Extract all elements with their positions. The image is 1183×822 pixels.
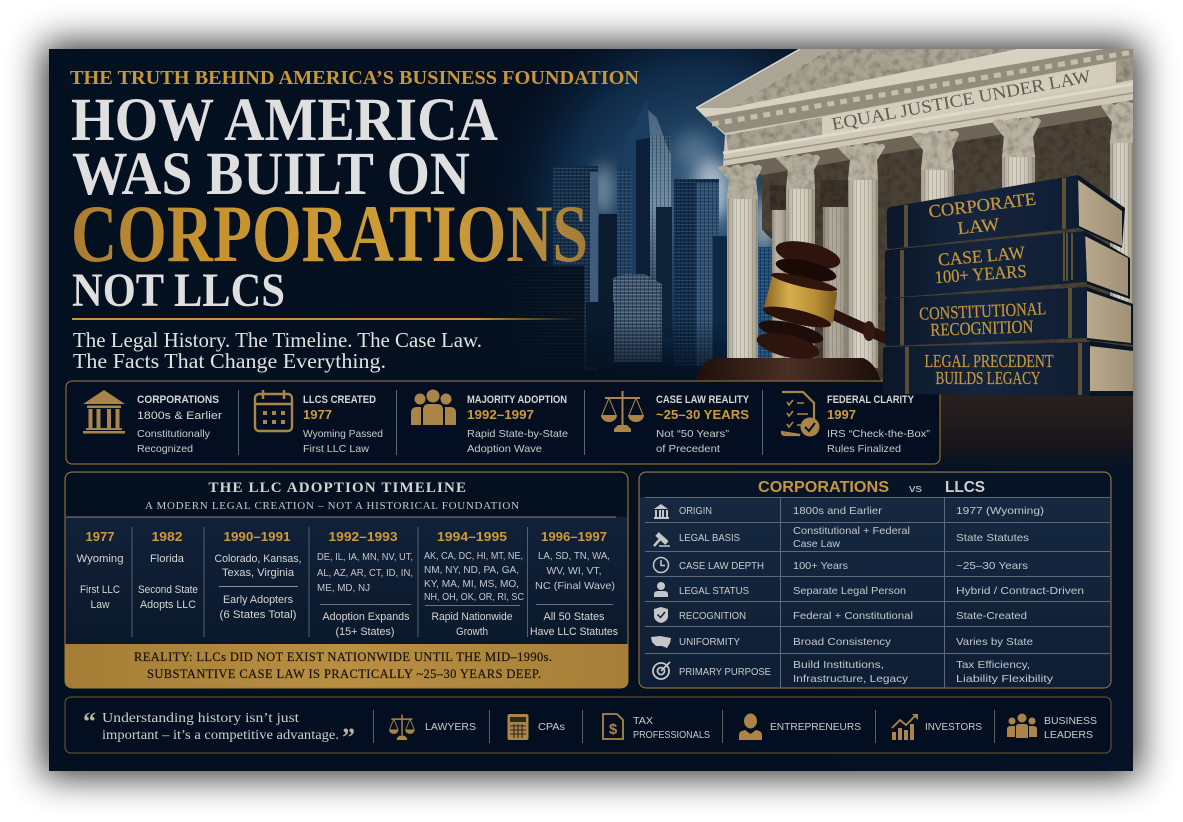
column 1994–1995: 1994–1995 [437, 529, 507, 544]
row: origin [654, 504, 1044, 519]
row: recognition: State-Created [956, 610, 1027, 622]
fact: majority adoption: MAJORITY ADOPTION [467, 394, 567, 406]
column 1977: First LLC [80, 584, 120, 596]
column 1982: Adopts LLC [140, 599, 196, 611]
fact: majority adoption [467, 394, 568, 455]
column 2 [776, 154, 820, 362]
row: legal basis [654, 525, 1029, 550]
reality callout: REALITY: LLCs DID NOT EXIST NATIONWIDE UNTIL THE MID–1990s. [134, 650, 552, 664]
column 1994–1995: Rapid Nationwide [432, 611, 512, 623]
icon: clock [654, 558, 668, 572]
quote: important – it’s a competitive advantage. [102, 728, 339, 743]
gold rule [72, 318, 577, 320]
fact: corporations: Constitutionally [137, 428, 211, 440]
book 3: CONSTITUTIONAL [919, 298, 1047, 324]
audience: investors: INVESTORS [925, 721, 982, 733]
column 1982 [138, 529, 198, 611]
column 3 [838, 143, 885, 368]
cornice [696, 49, 1101, 117]
column 1990–1991: Early Adopters [223, 594, 293, 606]
row: legal basis: Constitutional + Federal [793, 525, 910, 537]
audience: tax professionals: TAX [633, 715, 653, 727]
column 1990–1991: Texas, Virginia [222, 567, 295, 579]
clouds [593, 132, 771, 253]
audience: entrepreneurs [739, 714, 861, 740]
audience: business leaders [1007, 714, 1097, 741]
row: uniformity: Broad Consistency [793, 636, 892, 648]
stack of law books [883, 175, 1133, 396]
row: uniformity: Varies by State [956, 636, 1033, 648]
pediment relief [730, 49, 1018, 108]
book 2 [885, 231, 1130, 299]
row: primary purpose: Build Institutions, [793, 659, 884, 671]
column 1996–1997: Have LLC Statutes [530, 626, 618, 638]
column 1994–1995: Growth [456, 626, 488, 638]
dentil zone [705, 44, 1133, 133]
back columns [770, 180, 850, 360]
book 3 [885, 287, 1133, 346]
title line 1: HOW AMERICA [71, 87, 498, 154]
icon: target [653, 662, 670, 679]
fact: corporations: CORPORATIONS [137, 394, 219, 406]
interior shadow [762, 116, 1133, 380]
comparison header: LLCS [945, 479, 985, 496]
column 1992–1993: (15+ States) [336, 626, 394, 638]
icon: bank [654, 504, 669, 519]
city skyline [500, 99, 772, 382]
fact: federal clarity: IRS “Check-the-Box” [827, 428, 931, 440]
fact: majority adoption: Rapid State-by-State [467, 428, 568, 440]
fact: case law reality: of Precedent [656, 443, 720, 455]
column 1994–1995: KY, MA, MI, MS, MO, [424, 578, 519, 590]
fact: federal clarity: FEDERAL CLARITY [827, 394, 915, 406]
subtitle: The Facts That Change Everything. [73, 349, 386, 373]
column 1990–1991: Colorado, Kansas, [214, 553, 302, 565]
left frieze relief [726, 117, 822, 153]
sky glow [516, 49, 795, 362]
row: origin: 1800s and Earlier [793, 505, 883, 517]
book 4: BUILDS LEGACY [936, 368, 1040, 388]
column 1992–1993 [317, 529, 413, 638]
row: legal status [654, 582, 1084, 597]
audience: lawyers: LAWYERS [425, 721, 476, 733]
courthouse [696, 44, 1133, 395]
fact: LLCs created: LLCS CREATED [303, 394, 376, 406]
row: case law depth: ~25–30 Years [956, 560, 1028, 572]
column 1994–1995 [424, 529, 524, 638]
gavel [695, 236, 885, 384]
fact: case law reality: CASE LAW REALITY [656, 394, 750, 406]
entablature [696, 49, 1133, 166]
row: case law depth [654, 558, 1028, 572]
audience: investors [892, 714, 982, 740]
title line 4: NOT LLCS [72, 264, 285, 317]
fact: LLCs created: First LLC Law [303, 443, 369, 455]
fact: majority adoption: Adoption Wave [467, 443, 542, 455]
row: legal status: Hybrid / Contract-Driven [956, 585, 1084, 597]
row: case law depth: CASE LAW DEPTH [679, 560, 764, 572]
audience: lawyers [389, 715, 476, 740]
column 1992–1993: 1992–1993 [328, 529, 398, 544]
icon: courthouse [83, 390, 125, 434]
panel: LLC adoption timeline [65, 472, 628, 688]
row: primary purpose: Infrastructure, Legacy [793, 673, 909, 685]
book 3: RECOGNITION [930, 316, 1034, 340]
column 1992–1993: AL, AZ, AR, CT, ID, IN, [317, 567, 413, 579]
head [756, 241, 840, 359]
inscription: EQUAL JUSTICE UNDER LAW [830, 66, 1092, 134]
column 1996–1997: LA, SD, TN, WA, [538, 550, 610, 562]
column 5 [992, 117, 1041, 195]
row: legal basis: LEGAL BASIS [679, 532, 740, 544]
book 1: LAW [956, 214, 1000, 238]
fact: corporations: Recognized [137, 443, 193, 455]
icon: gavel [654, 534, 670, 546]
fact: federal clarity: Rules Finalized [827, 443, 901, 455]
row: primary purpose: Liability Flexibility [956, 673, 1054, 685]
column 1996–1997: All 50 States [544, 611, 605, 623]
comparison header: vs [909, 483, 923, 495]
icon: people [411, 390, 456, 425]
icon: shield [654, 607, 668, 623]
panel: corporations vs LLCs comparison [639, 472, 1111, 688]
panel: key facts strip [66, 381, 940, 464]
audience: tax professionals: PROFESSIONALS [633, 729, 710, 741]
audience: tax professionals: $ [609, 721, 618, 738]
audience: tax professionals [603, 714, 710, 741]
inscription band [823, 62, 1113, 137]
title line 3: CORPORATIONS [71, 188, 588, 279]
column 1996–1997: 1996–1997 [541, 529, 607, 544]
column 1977: Law [90, 599, 110, 611]
column 1 [718, 164, 762, 360]
book 2: CASE LAW [937, 242, 1026, 270]
quote: ” [342, 723, 355, 752]
fact: corporations: 1800s & Earlier [137, 410, 222, 422]
row: origin: ORIGIN [679, 505, 712, 517]
sound block [696, 358, 880, 380]
column 1992–1993: ME, MD, NJ [317, 582, 370, 594]
row: recognition [654, 607, 1027, 623]
column 1977: 1977 [86, 529, 114, 544]
reality callout [66, 644, 628, 688]
book 1 [887, 175, 1125, 249]
icon: scales [601, 391, 644, 432]
audience: CPAs: CPAs [538, 721, 565, 733]
column 1992–1993: DE, IL, IA, MN, NV, UT, [317, 551, 413, 563]
row: recognition: Federal + Constitutional [793, 610, 913, 622]
fact: majority adoption: 1992–1997 [467, 407, 534, 422]
column 1992–1993: Adoption Expands [322, 611, 410, 623]
quote [83, 707, 355, 752]
book 4 [883, 341, 1133, 396]
subtitle [73, 332, 481, 372]
row: primary purpose [653, 659, 1054, 685]
audience: entrepreneurs: ENTREPRENEURS [770, 721, 861, 733]
audience: CPAs [508, 714, 565, 740]
column 6 [1101, 101, 1133, 304]
timeline heading: THE LLC ADOPTION TIMELINE [208, 480, 466, 496]
soffit [723, 99, 1133, 175]
fact: federal clarity: 1997 [827, 407, 856, 422]
eyebrow heading: THE TRUTH BEHIND AMERICA’S BUSINESS FOUNDATION [70, 67, 640, 89]
audience: business leaders: LEADERS [1044, 729, 1093, 741]
column 1990–1991 [214, 529, 302, 621]
column 1990–1991: 1990–1991 [224, 529, 290, 544]
comparison header: CORPORATIONS [758, 479, 889, 496]
reality callout: SUBSTANTIVE CASE LAW IS PRACTICALLY ~25–30 YEARS DEEP. [147, 667, 541, 681]
icon: person [654, 582, 668, 597]
table floor [940, 394, 1133, 458]
row: primary purpose: PRIMARY PURPOSE [679, 666, 771, 678]
column 1994–1995: NH, OH, OK, OR, RI, SC [424, 591, 524, 603]
row: primary purpose: Tax Efficiency, [956, 659, 1030, 671]
column 1977: Wyoming [76, 553, 124, 565]
book 2: 100+ YEARS [934, 261, 1027, 287]
right frieze relief [1116, 58, 1133, 83]
column 1982: 1982 [152, 529, 182, 544]
fact: LLCs created: Wyoming Passed [303, 428, 383, 440]
column 1996–1997 [530, 529, 618, 638]
column 1996–1997: NC (Final Wave) [535, 580, 615, 592]
column 1977 [76, 529, 124, 611]
book 4: LEGAL PRECEDENT [924, 351, 1054, 371]
fact: federal clarity [827, 394, 931, 455]
roof edge [696, 49, 830, 108]
quote: “ [83, 707, 96, 736]
row: legal basis: State Statutes [956, 532, 1029, 544]
fact: LLCs created [303, 394, 383, 455]
subtitle: The Legal History. The Timeline. The Case Law. [73, 328, 482, 352]
main title [72, 99, 586, 306]
row: legal basis: Case Law [793, 538, 840, 550]
quote: Understanding history isn’t just [102, 711, 299, 726]
handle [830, 313, 885, 338]
row: origin: 1977 (Wyoming) [956, 505, 1044, 517]
column 1994–1995: NM, NY, ND, PA, GA, [424, 564, 519, 576]
column 1990–1991: (6 States Total) [220, 609, 296, 621]
comparison header [758, 479, 985, 496]
row: uniformity: UNIFORMITY [679, 636, 740, 648]
panel: quote and audiences [65, 697, 1111, 753]
fact: corporations [137, 394, 222, 455]
title line 2: WAS BUILT ON [72, 141, 470, 208]
timeline subheading: A MODERN LEGAL CREATION – NOT A HISTORICAL FOUNDATION [145, 500, 519, 512]
icon: checklist [782, 392, 820, 436]
column 1994–1995: AK, CA, DC, HI, MT, NE, [424, 550, 523, 562]
book 1: CORPORATE [927, 189, 1037, 222]
row: legal status: Separate Legal Person [793, 585, 906, 597]
fact: case law reality: Not “50 Years” [656, 428, 730, 440]
fact: LLCs created: 1977 [303, 407, 332, 422]
row: recognition: RECOGNITION [679, 610, 746, 622]
column 1996–1997: WV, WI, VT, [546, 565, 602, 577]
column 1982: Second State [138, 584, 198, 596]
fact: case law reality [656, 394, 750, 455]
icon: US map [651, 636, 671, 648]
column 1982: Florida [150, 553, 185, 565]
row: legal status: LEGAL STATUS [679, 585, 749, 597]
icon: calendar [255, 390, 292, 431]
row: case law depth: 100+ Years [793, 560, 848, 572]
row: uniformity [651, 636, 1033, 648]
column 4 [911, 130, 959, 208]
audience: business leaders: BUSINESS [1044, 715, 1097, 727]
fact: case law reality: ~25–30 YEARS [656, 407, 749, 422]
